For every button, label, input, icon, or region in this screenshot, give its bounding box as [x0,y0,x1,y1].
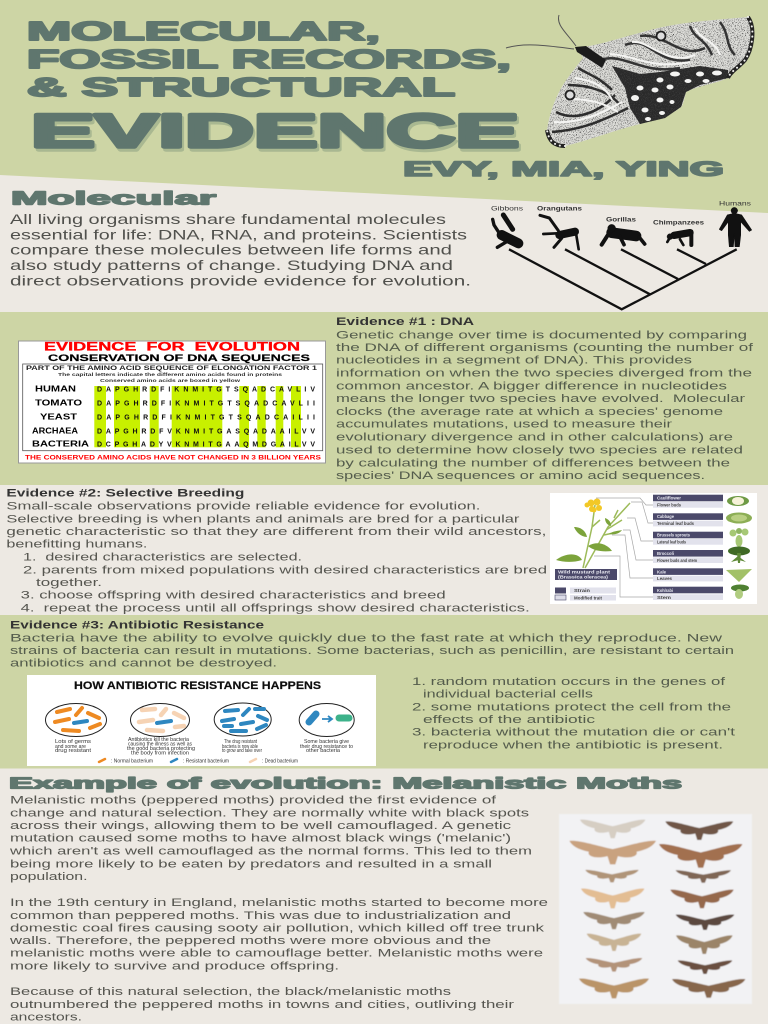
evidence 1 body: common ancestor. A bigger difference in nucleotides [336,380,727,392]
primate labels [491,200,752,226]
variety rows: Terminal leaf buds [657,521,695,526]
moth lower wing bands [552,68,628,132]
moth white spots [631,70,722,121]
title line 3: & STRUCTURAL [27,72,455,102]
step captions: Antibiotics kill the bacteria [128,737,189,743]
evidence 1 body: nucleotides in a segment of DNA). This provides [336,355,692,367]
moths left column [569,820,656,998]
amino acid sequences: DAPGHRDFVKNMITGASQADAAILVV [97,428,315,435]
panel: melanistic moths [9,776,683,1024]
text block: moths paragraph 2: In the 19th century in England, melanistic moths started to become more [10,897,548,909]
evidence 2 body: 1. desired characteristics are selected. [23,552,302,564]
petri dish 2 [130,704,190,736]
vegetable icons [726,496,752,599]
chart: DNA conservation table [18,341,326,463]
evidence 2 body: benefitting humans. [6,539,147,551]
table note: The capital letters indicate the different amino acids found in proteins [58,372,282,378]
text block: moths paragraph 2 [9,897,548,973]
title shadow: EVIDENCE [33,107,521,160]
moth upper wing bands [600,22,735,69]
label: wild mustard: (Brassica oleracea) [558,574,609,580]
label: wild mustard: Wild mustard plant [558,570,611,574]
heading: molecular: Molecular [11,187,216,208]
moth eye spots [656,32,666,40]
panel: evidence 1 background [0,312,768,485]
text block: moths paragraph 1: population. [10,871,88,883]
evidence 2 body: together. [36,577,102,589]
gorilla [602,233,645,245]
text block: moths paragraph 3: outnumbered the peppered moths in towns and cities, outliving their [10,999,514,1011]
species labels: TOMATO [35,397,83,407]
species labels: HUMAN [35,384,76,394]
text block: moths paragraph 1 [9,794,532,883]
chart legend: : Normal bacterium [111,758,153,764]
evidence 1 body: information on when the two species diverged from the [336,368,752,380]
amino acid sequences: DAPGHRDFIKNMITGTSQADCAVLIV [97,387,315,394]
moth wings [547,17,752,146]
primate labels: Gibbons [491,206,524,213]
moth pale wing lines [554,28,720,122]
evidence 1 body: species' DNA sequences or amino acid sequences. [336,470,705,482]
moth antennae [506,15,576,49]
connector lines [594,498,653,597]
step captions: drug resistant [55,748,92,754]
step captions: causing the illness as well as [128,742,192,748]
gibbon [493,215,518,247]
chart legend [99,758,298,764]
text block: moths paragraph 1: change and natural selection. They are normally white with black spots [10,807,529,819]
evidence 2 body: 4. repeat the process until all offsprings show desired characteristics. [21,602,530,614]
heading: evidence 3: Evidence #3: Antibiotic Resistance [10,619,264,631]
amino acid sequences: DAPGHRDFIKNMITGTSQADCAVLII [97,400,315,407]
legend: strain and modified trait: Modified trait [574,595,603,600]
table title: EVIDENCE FOR EVOLUTION [44,342,300,354]
amino acid sequences: DAPGHRDFIKNMITGTSQADCAILII [97,414,315,421]
mustard flowers [584,498,602,512]
chart title: HOW ANTIBIOTIC RESISTANCE HAPPENS [74,680,321,692]
chart: how antibiotic resistance happens [27,675,376,766]
step captions: bacteria is now able [222,744,258,750]
chart legend: : Resistant bacterium [183,758,229,764]
table caption: PART OF THE AMINO ACID SEQUENCE OF ELONGATION FACTOR 1 [26,366,318,372]
legend: strain and modified trait: Strain [574,588,591,593]
amino acid sequences [97,387,315,449]
text block: antibiotic resistance steps: individual bacterial cells [423,689,593,701]
moth scalloped edge [547,17,752,146]
text block: evidence 2 [6,488,547,614]
variety rows: Lateral leaf buds [657,540,687,544]
species labels: BACTERIA [32,439,89,449]
petri dish 3 [214,703,271,736]
step captions: The drug resistant [224,739,257,745]
primate labels: Gorillas [606,217,636,224]
text block: molecular intro: essential for life: DNA, RNA, and proteins. Scientists [10,227,467,242]
text block: antibiotic resistance steps: effects of the antibiotic [423,714,595,726]
text block: moths paragraph 2: more likely to survive and produce offspring. [10,961,339,973]
variety rows: Leaves [657,576,673,581]
title [27,16,521,160]
heading: melanistic moths: Example of evolution: Melanistic Moths [9,776,683,793]
text block: moths paragraph 1: which aren't as well camouflaged as the normal forms. This led to them [9,846,532,858]
step captions: the good bacteria protecting [127,746,195,752]
evidence 1 body [336,329,754,482]
text block: moths paragraph 1: being more likely to be eaten by predators and resulted in a small [10,858,492,870]
table subtitle: CONSERVATION OF DNA SEQUENCES [48,353,310,364]
primate silhouettes [493,207,752,249]
evidence 1 body: evolutionary divergence and in other calculations) are [336,432,733,444]
evidence 2 body: 3. choose offspring with desired characteristics and breed [21,590,446,602]
moth dark band [612,66,728,124]
evidence 1 body: by calculating the number of differences between the [336,457,730,469]
authors: EVY, MIA, YING [403,158,724,181]
panel: header background [0,0,768,213]
orangutan [540,215,579,249]
step captions: Lots of germs [55,739,91,745]
evidence 1 body: accumulates mutations, used to measure their [336,419,672,431]
variety rows: Cabbage [657,514,675,519]
text block: moths paragraph 1: across their wings, allowing them to be well camouflaged. A genetic [10,820,511,832]
tree branches [509,249,737,309]
evidence 3 intro [10,632,734,670]
photo: moth specimens [559,814,752,1004]
step captions [55,737,353,756]
text block: molecular intro: also study patterns of change. Studying DNA and [10,258,453,273]
text block: moths paragraph 2: walls. Therefore, the peppered moths were more obvious and the [9,935,491,947]
label: wild mustard [555,569,617,580]
step captions: Some bacteria give [304,739,349,745]
evidence 2 body: genetic characteristic so that they are different from their wild ancestors, [6,526,546,538]
species labels [32,384,89,449]
variety rows: Brussels sprouts [657,532,691,538]
text block: moths paragraph 2: domestic coal fires causing sooty air pollution, which killed off tree trunk [10,922,544,934]
evidence 2 body: 2. parents from mixed populations with desired characteristics are bred [23,564,547,576]
step captions: and some are [55,744,86,750]
text block: moths paragraph 2: melanistic moths were able to camouflage better. Melanistic moths were [10,948,543,960]
text block: molecular intro: direct observations provide evidence for evolution. [10,273,471,288]
moth body [575,46,606,68]
text block: moths paragraph 1: Melanistic moths (peppered moths) provided the first evidence of [10,794,497,806]
variety rows: Cauliflower [657,496,681,500]
evidence 3 intro: Bacteria have the ability to evolve quickly due to the fast rate at which they reproduce. New [10,632,723,644]
title evidence word: EVIDENCE [31,104,519,157]
evidence 1 body: Genetic change over time is documented by comparing [336,329,747,341]
evidence 2 body [6,500,547,614]
variety rows: Flower buds [657,502,682,508]
evidence 1 body: clocks (the average rate at which a species' genome [336,406,723,418]
text block: molecular intro: All living organisms share fundamental molecules [10,212,446,227]
icon: moth illustration [506,15,752,146]
table note 2: Conserved amino acids are boxed in yellow [100,378,240,384]
text block: moths paragraph 3: Because of this natural selection, the black/melanistic moths [10,986,451,998]
text block: molecular intro: compare these molecules between life forms and [10,243,452,258]
text block: antibiotic resistance steps: 1. random mutation occurs in the genes of [412,676,726,688]
heading: evidence 1: Evidence #1 : DNA [336,316,474,328]
variety rows: Broccoli [657,551,674,556]
evidence 3 intro: strains of bacteria can result in mutations. Some bacterias, such as penicillin, are resistant to certain [10,645,734,657]
variety rows [653,495,723,600]
text block: antibiotic resistance steps [412,676,736,751]
text block: evidence 3 [10,619,734,670]
text block: moths paragraph 2: common than peppered moths. This was due to industrialization and [10,910,511,922]
petri dish 4 [299,704,354,736]
step captions: to grow and take over [222,748,262,754]
text block: molecular intro [10,212,471,288]
title line 2: FOSSIL RECORDS, [27,44,511,74]
title line 1: MOLECULAR, [27,16,380,46]
evidence 3 intro: antibiotics and cannot be destroyed. [10,658,277,670]
mustard plant [583,503,630,568]
evidence 2 body: Selective breeding is when plants and animals are bred for a particular [6,513,520,525]
evidence 2 body: Small-scale observations provide reliable evidence for evolution. [6,500,480,512]
variety rows: Kale [657,570,667,574]
conserved columns [94,386,301,447]
evidence 1 body: used to determine how closely two species are related [336,444,743,456]
panel: molecular [10,187,471,288]
species labels: ARCHAEA [32,425,78,435]
chart: primate phylogeny [491,200,752,309]
primate labels: Chimpanzees [653,219,704,226]
amino acid sequences: DCPGHADYVKNMITGAAQMDGAILVV [97,442,315,449]
text block: antibiotic resistance steps: 3. bacteria without the mutation die or can't [412,727,736,739]
legend: strain and modified trait [555,588,616,600]
table footnote: THE CONSERVED AMINO ACIDS HAVE NOT CHANGED IN 3 BILLION YEARS [25,455,322,462]
text block: moths paragraph 3: ancestors. [10,1012,82,1024]
variety rows: Kohlrabi [657,588,673,593]
moths right column [659,821,745,998]
petri dish 1 [46,704,106,736]
step captions: their drug resistance to [300,744,353,750]
variety rows: Stem [657,595,671,600]
text block: antibiotic resistance steps: reproduce when the antibiotic is present. [423,739,723,751]
text block: evidence 1 [336,316,754,482]
variety rows: Flower buds and stem [657,558,697,563]
chart: brassica selective breeding [550,493,757,604]
text block: moths paragraph 1: mutation caused some moths to have almost black wings ('melanic') [10,833,511,845]
primate labels: Humans [719,200,752,207]
chimpanzee [667,232,691,245]
panel: evidence 3 background [0,615,768,768]
heading: evidence 2: Evidence #2: Selective Breeding [6,488,244,500]
species labels: YEAST [40,411,78,421]
table frame [23,364,323,451]
chart legend: : Dead bacterium [262,758,298,764]
evidence 1 body: means the longer two species have evolved. Molecular [336,393,745,405]
text block: antibiotic resistance steps: 2. some mutations protect the cell from the [412,701,731,713]
evidence 1 body: the DNA of different organisms (counting the number of [336,342,754,354]
human [731,207,738,214]
primate labels: Orangutans [537,206,582,213]
text block: moths paragraph 3 [10,986,514,1024]
step captions: the body from infection [131,750,189,756]
step captions: other bacteria [306,748,340,754]
